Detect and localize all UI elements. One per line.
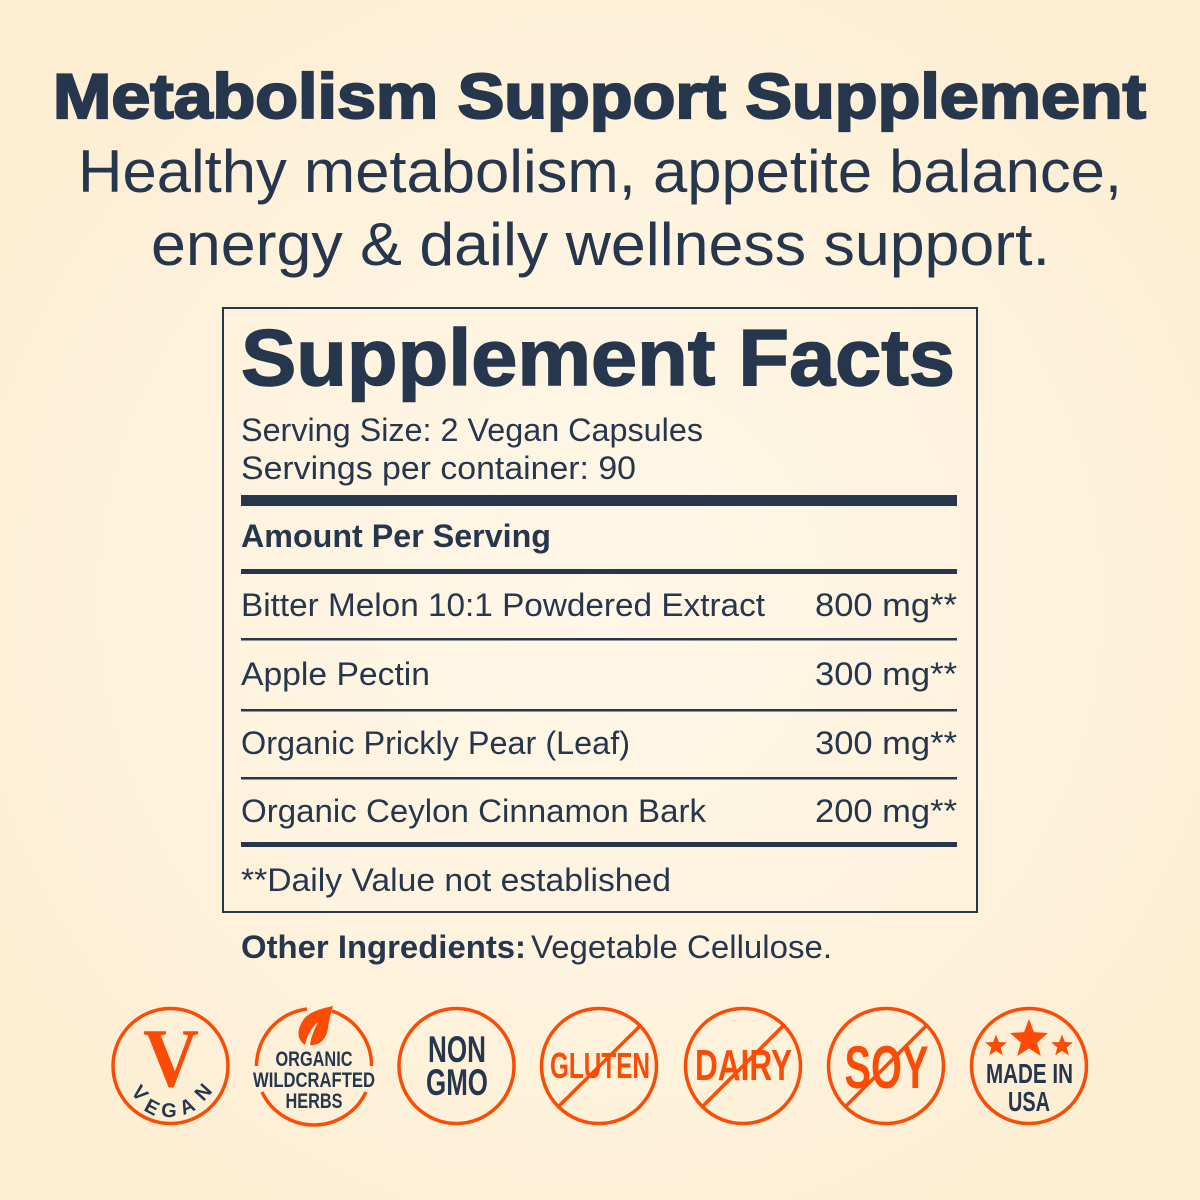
subtitle: energy & daily wellness support. xyxy=(151,211,1050,278)
row: apple pectin xyxy=(241,656,957,692)
row: bitter melon: Bitter Melon 10:1 Powdered Extract xyxy=(241,587,765,623)
badge: organic wildcrafted herbs: ORGANIC xyxy=(276,1047,352,1071)
subtitle: Healthy metabolism, appetite balance, xyxy=(78,138,1122,205)
row: prickly pear: Organic Prickly Pear (Leaf) xyxy=(241,725,630,761)
other ingredients: Other Ingredients: xyxy=(241,929,526,965)
badge: soy free: SOY xyxy=(844,1034,928,1101)
row: ceylon cinnamon: 200 mg** xyxy=(815,793,957,829)
row: ceylon cinnamon xyxy=(241,793,957,829)
badge: vegan xyxy=(113,1008,228,1124)
title: Metabolism Support Supplement xyxy=(53,62,1146,132)
panel: supplement facts xyxy=(223,308,977,912)
badge: gluten free: GLUTEN xyxy=(550,1045,650,1086)
badge: made in usa: USA xyxy=(1008,1086,1050,1117)
badge: non gmo: GMO xyxy=(426,1061,488,1103)
heading: supplement facts: Supplement Facts xyxy=(241,313,955,402)
serving info xyxy=(241,412,703,486)
serving info: Serving Size: 2 Vegan Capsules xyxy=(241,412,703,448)
badge: organic wildcrafted herbs xyxy=(253,1006,375,1125)
other ingredients: Vegetable Cellulose. xyxy=(531,929,832,965)
icon: stars xyxy=(985,1019,1073,1056)
badge: made in usa xyxy=(972,1008,1086,1124)
badge: soy free xyxy=(828,1008,944,1124)
badge: made in usa: MADE IN xyxy=(986,1058,1073,1089)
badge: vegan: G xyxy=(161,1100,177,1122)
badge: vegan: V xyxy=(143,1012,199,1105)
badge: vegan: E xyxy=(140,1095,163,1121)
row: ceylon cinnamon: Organic Ceylon Cinnamon Bark xyxy=(241,793,707,829)
badge: vegan: N xyxy=(191,1080,217,1105)
badge: vegan: V xyxy=(127,1081,152,1106)
badge: non gmo xyxy=(399,1008,514,1124)
badge: non gmo: NON xyxy=(428,1028,486,1070)
other ingredients xyxy=(241,929,832,965)
badge: organic wildcrafted herbs: WILDCRAFTED xyxy=(253,1068,375,1092)
row: apple pectin: Apple Pectin xyxy=(241,656,430,692)
row: prickly pear: 300 mg** xyxy=(815,725,957,761)
serving info: Servings per container: 90 xyxy=(241,450,636,486)
badge: vegan: A xyxy=(176,1094,198,1120)
row: bitter melon: 800 mg** xyxy=(815,587,957,623)
amount per serving: Amount Per Serving xyxy=(241,518,551,554)
row: prickly pear xyxy=(241,725,957,761)
badge: gluten free xyxy=(542,1008,656,1124)
badge: organic wildcrafted herbs: HERBS xyxy=(286,1089,342,1113)
daily value note: **Daily Value not established xyxy=(241,862,671,898)
row: apple pectin: 300 mg** xyxy=(815,656,957,692)
icon: leaf xyxy=(298,1006,333,1045)
subtitle xyxy=(78,138,1122,278)
badge: dairy free xyxy=(686,1008,800,1124)
badge: dairy free: DAIRY xyxy=(695,1041,792,1090)
